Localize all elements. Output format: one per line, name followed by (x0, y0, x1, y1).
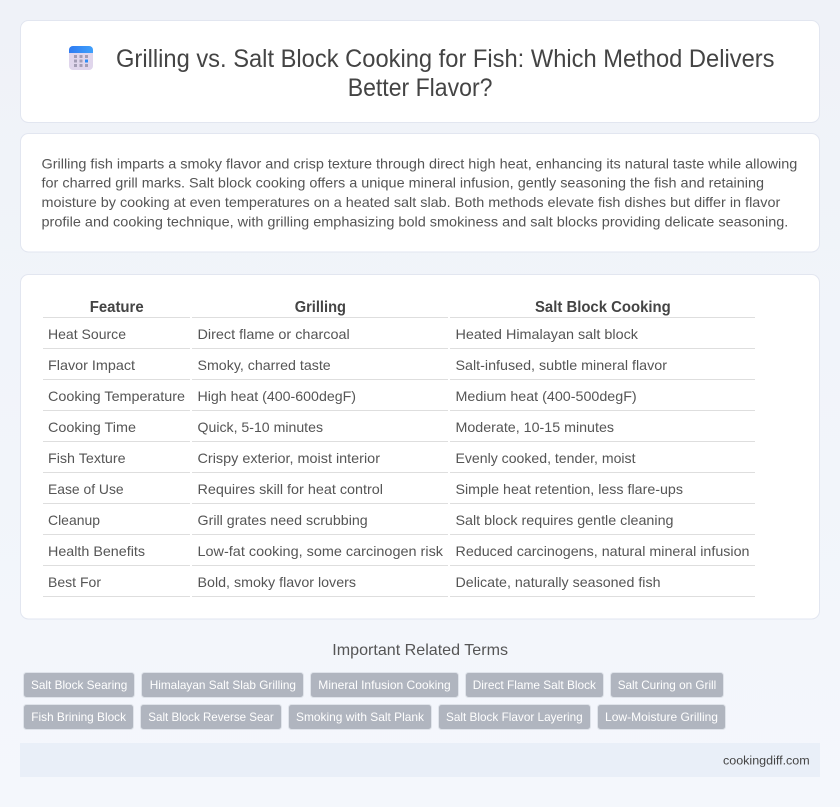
tag: salt curing on grill: Salt Curing on Grill (618, 678, 716, 692)
row: flavor impact: Flavor Impact (48, 357, 135, 373)
text block: introduction paragraph (42, 155, 797, 229)
row: heat source: Heat Source (48, 326, 126, 342)
panel: comparison table (20, 274, 820, 619)
row: heat source: Direct flame or charcoal (198, 326, 350, 342)
tag: himalayan salt slab grilling (142, 672, 304, 698)
tag: salt block flavor layering: Salt Block Flavor Layering (446, 710, 583, 724)
panel: title (20, 20, 820, 122)
row: cooking time (48, 419, 614, 435)
tag: salt block reverse sear (140, 704, 282, 730)
heading: Grilling vs. Salt Block Cooking for Fish: Which Method Delivers (116, 46, 774, 73)
row: health benefits (48, 543, 750, 559)
table header: Feature (90, 299, 144, 316)
tag: salt block reverse sear: Salt Block Reverse Sear (148, 710, 274, 724)
row: cooking temperature: Cooking Temperature (48, 388, 185, 404)
table header (90, 299, 671, 316)
heading: Better Flavor? (348, 75, 492, 102)
row: fish texture: Evenly cooked, tender, moist (456, 450, 636, 466)
tag: direct flame salt block: Direct Flame Salt Block (473, 678, 597, 692)
tag: fish brining block: Fish Brining Block (31, 710, 127, 724)
tag: mineral infusion cooking: Mineral Infusion Cooking (318, 678, 451, 692)
tag: smoking with salt plank: Smoking with Salt Plank (296, 710, 425, 724)
tag: mineral infusion cooking (310, 672, 458, 698)
row: ease of use (48, 481, 683, 497)
row: flavor impact: Smoky, charred taste (198, 357, 331, 373)
heading: important related terms: Important Related Terms (332, 642, 508, 659)
table header: Salt Block Cooking (535, 299, 671, 316)
panel: introduction (20, 134, 820, 252)
row: cooking time: Cooking Time (48, 419, 136, 435)
tag: low-moisture grilling (598, 704, 726, 730)
tag: salt curing on grill (610, 672, 724, 698)
row: fish texture: Crispy exterior, moist interior (198, 450, 380, 466)
row: cleanup: Grill grates need scrubbing (198, 512, 368, 528)
row: heat source: Heated Himalayan salt block (456, 326, 639, 342)
row: heat source (48, 326, 639, 342)
row: fish texture: Fish Texture (48, 450, 126, 466)
row: health benefits: Low-fat cooking, some carcinogen risk (198, 543, 444, 559)
row: cooking time: Quick, 5-10 minutes (198, 419, 323, 435)
row: cleanup (48, 512, 674, 528)
text block: introduction paragraph: profile and cooking technique, with grilling emphasizing bold smokiness and salt blocks providing delicate seasoning. (42, 213, 788, 229)
row: flavor impact (48, 357, 667, 373)
tag: salt block searing (24, 672, 134, 698)
footer (20, 743, 820, 777)
row: health benefits: Reduced carcinogens, natural mineral infusion (456, 543, 750, 559)
tag: himalayan salt slab grilling: Himalayan Salt Slab Grilling (150, 678, 296, 692)
row: health benefits: Health Benefits (48, 543, 145, 559)
row: ease of use: Simple heat retention, less flare-ups (456, 481, 683, 497)
icon: calendar (69, 46, 93, 70)
row: best for (48, 574, 660, 590)
row: best for: Delicate, naturally seasoned fish (456, 574, 660, 590)
tag: smoking with salt plank (288, 704, 432, 730)
text block: introduction paragraph: moisture by cooking at even temperatures on a heated salt slab. Both methods elevate fish dishes but differ in flavor (42, 194, 781, 210)
row: flavor impact: Salt-infused, subtle mineral flavor (456, 357, 667, 373)
row: cooking temperature: Medium heat (400-500degF) (456, 388, 637, 404)
tag: low-moisture grilling: Low-Moisture Grilling (605, 710, 718, 724)
footer: cookingdiff.com (723, 753, 810, 767)
row: best for: Best For (48, 574, 101, 590)
row: cooking temperature: High heat (400-600degF) (198, 388, 356, 404)
text block: introduction paragraph: for charred grill marks. Salt block cooking offers a unique mineral infusion, gently seasoning the fish and retaining (42, 175, 764, 191)
row: cleanup: Salt block requires gentle cleaning (456, 512, 674, 528)
row: best for: Bold, smoky flavor lovers (198, 574, 356, 590)
text block: introduction paragraph: Grilling fish imparts a smoky flavor and crisp texture through direct high heat, enhancing its natural taste while allowing (42, 155, 797, 171)
tag: direct flame salt block (466, 672, 604, 698)
tag: salt block searing: Salt Block Searing (31, 678, 127, 692)
table header: Grilling (295, 299, 346, 316)
row: cooking time: Moderate, 10-15 minutes (456, 419, 614, 435)
tag: salt block flavor layering (438, 704, 590, 730)
tags: related terms (24, 672, 726, 730)
row: fish texture (48, 450, 636, 466)
row: cooking temperature (48, 388, 637, 404)
heading (116, 46, 774, 102)
row: cleanup: Cleanup (48, 512, 100, 528)
row: ease of use: Requires skill for heat control (198, 481, 383, 497)
tag: fish brining block (24, 704, 134, 730)
row: ease of use: Ease of Use (48, 481, 124, 497)
